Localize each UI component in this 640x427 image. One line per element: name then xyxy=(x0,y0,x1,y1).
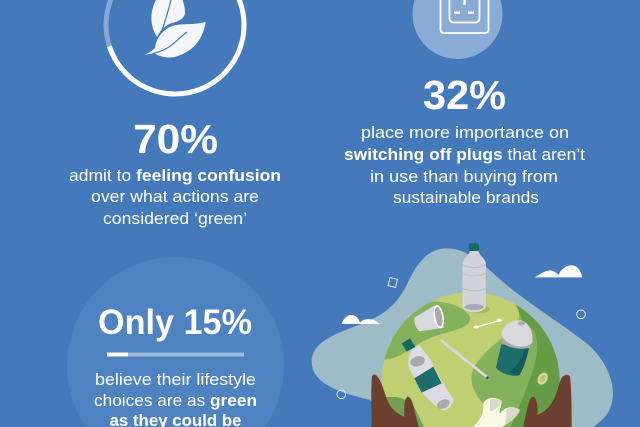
text: switching off plugs description xyxy=(344,123,585,207)
tall plastic bottle xyxy=(462,243,490,314)
illustration: globe with plastic waste held by hands xyxy=(312,243,613,427)
icon: plug socket in circle xyxy=(412,0,502,59)
text: lifestyle choices description: choices are as green xyxy=(94,391,257,410)
panel: only 15% stat circle xyxy=(67,257,284,427)
heading: 32%: 32% xyxy=(423,72,506,118)
plastic cup xyxy=(414,304,446,331)
cotton bud xyxy=(474,319,502,329)
bottle cap xyxy=(535,371,550,386)
text: feeling confusion description: over what actions are xyxy=(91,187,259,206)
globe xyxy=(377,292,567,427)
hands xyxy=(371,374,572,427)
text: switching off plugs description: sustainable brands xyxy=(393,188,539,207)
progress bar: 15% xyxy=(107,352,244,356)
text: switching off plugs description: switching off plugs that aren’t xyxy=(344,145,585,164)
text: feeling confusion description: admit to feeling confusion xyxy=(69,166,281,185)
straw xyxy=(441,340,488,378)
panel: 32% plugs stat xyxy=(344,0,585,207)
text: feeling confusion description xyxy=(69,166,281,228)
heading: 70%: 70% xyxy=(133,116,218,162)
text: switching off plugs description: place more importance on xyxy=(361,123,569,142)
icon: progress ring with leaves xyxy=(106,0,244,94)
decorative outlines xyxy=(337,278,585,399)
background blob xyxy=(312,248,613,427)
plastic glove xyxy=(473,398,520,427)
text: lifestyle choices description xyxy=(94,370,257,427)
small bottle xyxy=(402,338,453,411)
coffee cup with lid xyxy=(496,320,532,376)
clouds xyxy=(341,265,582,324)
text: switching off plugs description: in use than buying from xyxy=(370,167,558,186)
heading: Only 15%: Only 15% xyxy=(98,303,252,342)
panel: 70% confusion stat xyxy=(69,0,281,228)
text: lifestyle choices description: believe their lifestyle xyxy=(95,370,256,389)
text: feeling confusion description: considered ‘green’ xyxy=(103,209,247,228)
